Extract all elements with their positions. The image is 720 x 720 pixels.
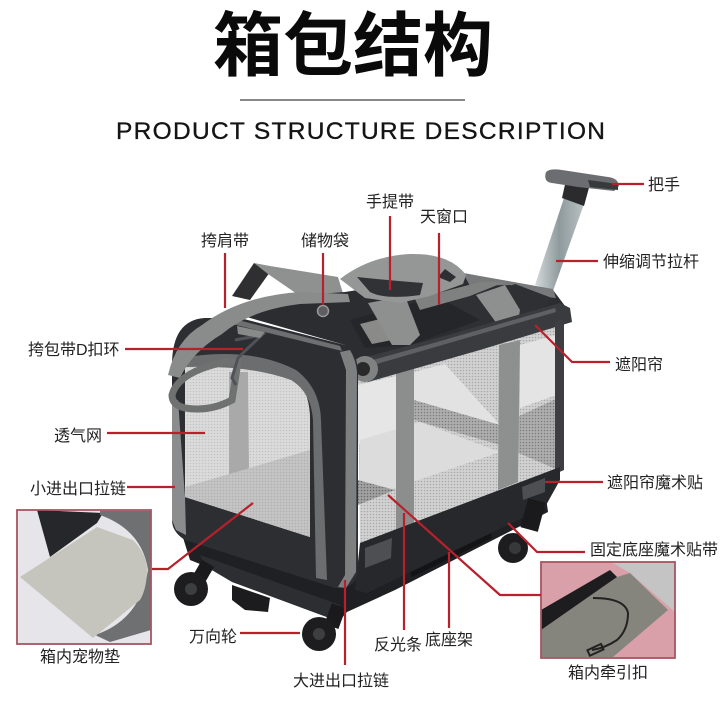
callout: D ring: 挎包带D扣环 [28, 341, 120, 359]
inset label: leash clip: 箱内牵引扣 [568, 664, 648, 682]
side lower band [355, 467, 560, 593]
callout: swivel wheel: 万向轮 [189, 628, 237, 646]
d-ring [232, 326, 265, 385]
callout: large zipper [293, 580, 389, 690]
product illustration: pet carrier [168, 169, 619, 651]
front mesh window [180, 354, 327, 580]
callout: pet mat [152, 503, 253, 569]
front panel [172, 318, 358, 588]
callout: carry handle [366, 193, 414, 290]
inset label: pet mat: 箱内宠物垫 [40, 648, 120, 666]
callout: sun shade: 遮阳帘 [615, 356, 663, 374]
callout: handle [612, 176, 680, 194]
telescopic handle [535, 169, 619, 291]
callout: base velcro strap [508, 523, 718, 559]
callout: small zipper: 小进出口拉链 [30, 480, 126, 498]
inset: leash clip [541, 562, 675, 658]
back carry loop [232, 263, 270, 300]
top straps [368, 296, 420, 345]
callout: telescopic rod: 伸缩调节拉杆 [603, 253, 699, 271]
callout: reflective strip: 反光条 [374, 636, 422, 654]
carry handle [340, 254, 466, 303]
callout: skylight [420, 208, 468, 305]
callout: skylight: 天窗口 [420, 208, 468, 226]
subtitle: PRODUCT STRUCTURE DESCRIPTION [116, 118, 605, 145]
callout: sun shade [535, 325, 663, 374]
callout: leash clip [388, 495, 541, 595]
inset: pet mat [17, 510, 151, 644]
callout: swivel wheel [189, 628, 300, 646]
storage pocket button [318, 306, 328, 316]
callout: base velcro strap: 固定底座魔术贴带 [590, 541, 718, 559]
wheels [174, 498, 546, 651]
callout: base frame: 底座架 [425, 631, 473, 649]
side mesh panel [358, 325, 560, 548]
callout: storage pocket: 储物袋 [301, 232, 349, 250]
callout: carry handle: 手提带 [366, 193, 414, 211]
sun shade roll bar [352, 303, 572, 382]
callout: shade velcro: 遮阳帘魔术贴 [607, 474, 703, 492]
callout: shoulder strap [201, 232, 249, 308]
base frame [180, 490, 548, 622]
callout: handle: 把手 [648, 176, 680, 194]
title: 箱包结构 [213, 7, 493, 85]
left zipper edge [172, 400, 186, 535]
shoulder strap [168, 292, 350, 409]
callout: shoulder strap: 挎肩带 [201, 232, 249, 250]
callout: large zipper: 大进出口拉链 [293, 672, 389, 690]
callout: breathable mesh: 透气网 [54, 427, 102, 445]
callout: storage pocket [301, 232, 349, 305]
callout: base frame [425, 552, 473, 649]
lid [236, 273, 565, 370]
